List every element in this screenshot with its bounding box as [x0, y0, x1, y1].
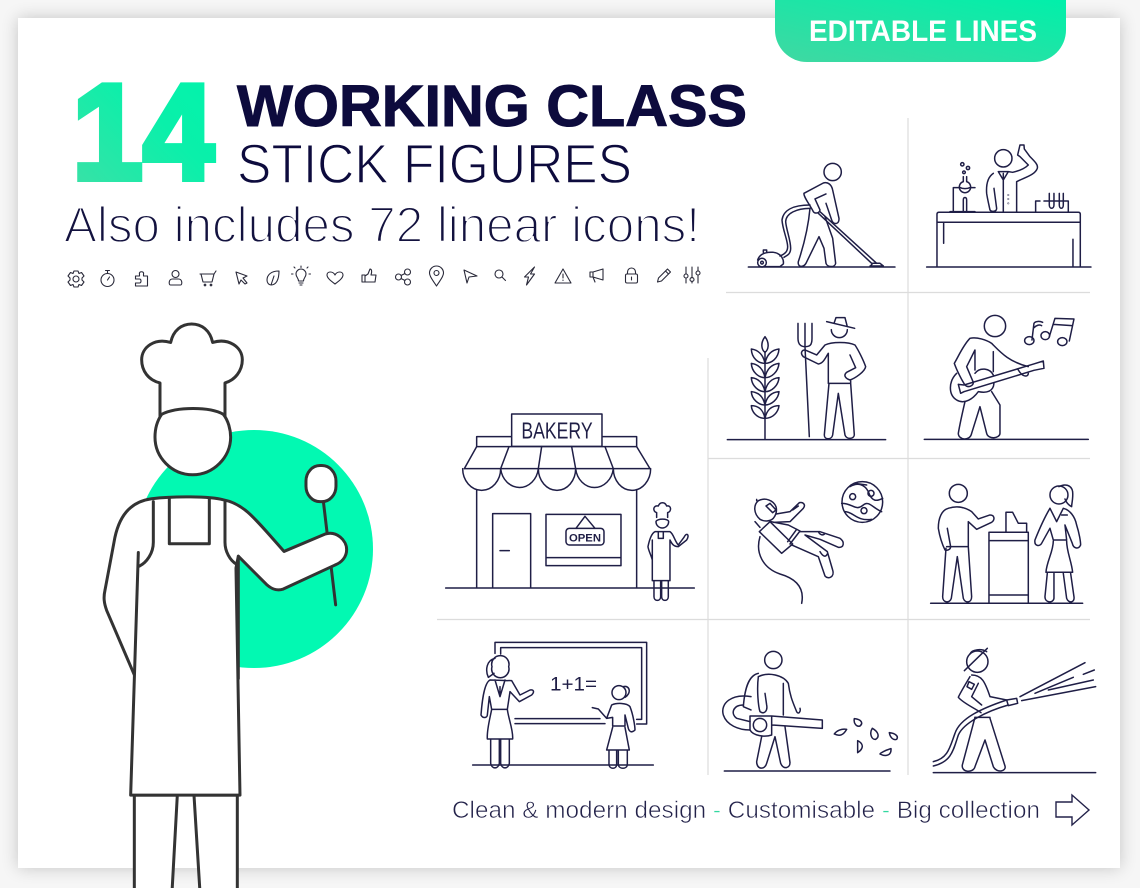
icon: megaphone — [590, 269, 603, 282]
scientist figure — [927, 145, 1091, 267]
icon: cursor — [236, 272, 247, 284]
tagline: 72 linear icons: Also includes 72 linear icons! — [64, 197, 700, 253]
icon: heart — [327, 272, 343, 284]
teacher and pupil — [473, 642, 653, 768]
astronaut legs — [792, 532, 843, 578]
bakery scene — [446, 414, 694, 600]
jetpack — [755, 522, 797, 553]
bakery sign: BAKERY — [521, 418, 593, 444]
tether — [759, 537, 802, 603]
icon: search — [495, 270, 506, 280]
icon: gear — [68, 271, 84, 287]
wheat — [751, 337, 779, 418]
bakery window — [546, 514, 621, 566]
icon: warning — [555, 269, 571, 283]
cashier figures — [931, 484, 1083, 603]
open sign — [566, 516, 604, 545]
water spray — [1020, 663, 1096, 701]
chef legs — [134, 795, 237, 888]
icon: stopwatch — [101, 270, 114, 286]
icon: map pin — [430, 266, 444, 286]
chef head — [155, 409, 231, 475]
icon: thumbs up — [362, 269, 376, 282]
blown leaves — [834, 719, 897, 755]
small chef — [648, 503, 688, 600]
planet — [842, 482, 883, 522]
icon: user — [169, 270, 182, 285]
number 14: 14 — [72, 56, 214, 208]
grid dividers — [437, 118, 1090, 775]
large chef figure — [104, 324, 347, 888]
bottom features line: Clean & modern design - Customisable - Big collection — [452, 797, 1040, 824]
bakery sign — [477, 414, 637, 447]
icon row — [68, 266, 700, 287]
icon: sliders — [684, 267, 700, 283]
firefighter figure — [933, 648, 1096, 773]
apron — [131, 499, 240, 795]
icon: navigation arrow — [464, 270, 477, 283]
astronaut helmet — [755, 499, 777, 521]
cash register counter — [989, 512, 1028, 603]
open sign: OPEN — [569, 532, 601, 544]
icon: share — [396, 269, 410, 285]
icon: lightning — [524, 267, 534, 285]
chef body and arm — [104, 497, 347, 679]
chalkboard — [495, 642, 647, 724]
green circle — [135, 430, 373, 668]
chalkboard equation: 1+1= — [550, 675, 597, 696]
music notes — [1032, 318, 1074, 341]
editable lines badge — [775, 0, 1066, 62]
guitarist figure — [924, 315, 1088, 439]
astronaut arm and suit — [771, 502, 804, 544]
spoon — [306, 466, 336, 605]
icon: cart — [200, 271, 216, 286]
bakery building — [446, 490, 694, 588]
icon: right arrow — [1056, 795, 1089, 825]
pupil — [592, 686, 635, 768]
icon: padlock — [626, 268, 638, 283]
icon: bulb — [292, 266, 310, 285]
title: working class: WORKING CLASS — [237, 74, 747, 139]
chef hat — [142, 324, 242, 419]
blower machine — [750, 716, 822, 736]
icon: puzzle — [136, 272, 148, 286]
icon: leaf — [267, 271, 279, 285]
fire hose — [933, 698, 1018, 766]
astronaut figure — [755, 482, 883, 603]
leaf blower figure — [723, 651, 897, 771]
vacuum cleaner figure — [748, 163, 895, 267]
teacher — [481, 656, 533, 768]
farmer figure — [727, 318, 886, 440]
subtitle: stick figures: STICK FIGURES — [237, 132, 632, 195]
icon: pencil — [658, 269, 670, 282]
awning — [463, 447, 651, 490]
editable lines badge: EDITABLE LINES — [809, 15, 1037, 48]
